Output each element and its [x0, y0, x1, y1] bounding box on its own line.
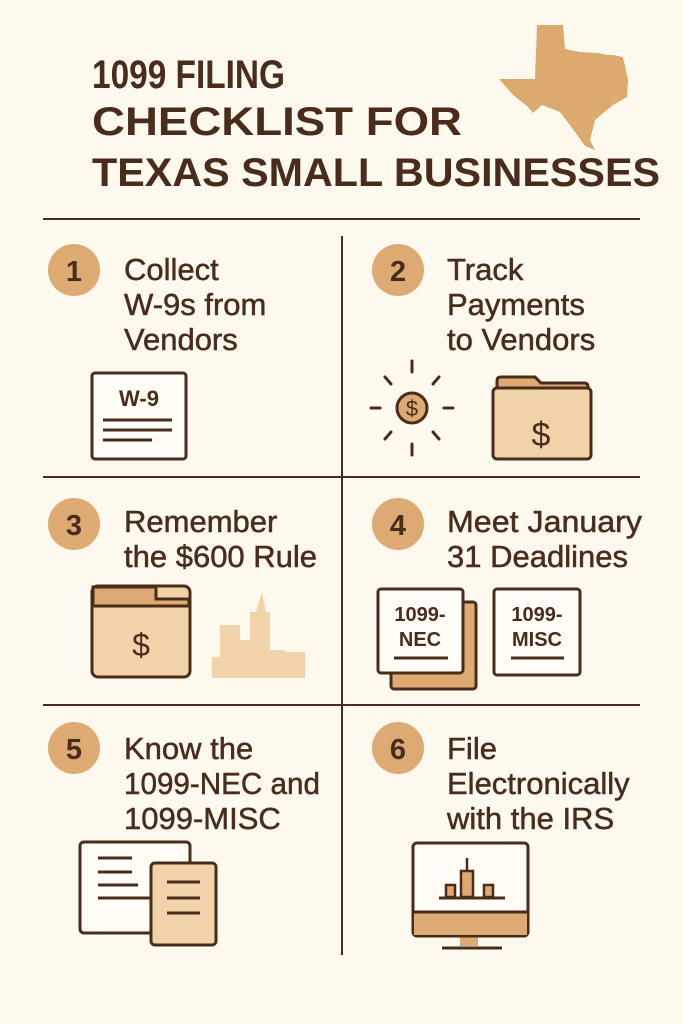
icon: sun coin	[371, 361, 453, 455]
title: TEXAS SMALL BUSINESSES	[92, 151, 660, 195]
text: step 3: the $600 Rule	[124, 539, 317, 574]
number badge 1	[48, 244, 100, 296]
panel: step 6	[372, 722, 630, 948]
text: step 2: to Vendors	[447, 322, 595, 357]
icon: W-9 form	[92, 373, 186, 459]
icon: Texas map	[499, 25, 628, 150]
text: step 1: Vendors	[124, 322, 238, 357]
icon: folder with dollar: $	[532, 416, 551, 454]
text: step 4: Meet January	[447, 504, 643, 539]
panel: step 2	[371, 244, 595, 459]
panel: step 1	[48, 244, 266, 459]
number badge 5	[48, 722, 100, 774]
text: step 5: 1099-MISC	[124, 801, 281, 836]
number badge 5: 5	[66, 734, 82, 766]
text: step 2: Track	[447, 252, 524, 287]
text: step 1: Collect	[124, 252, 219, 287]
icon: monitor chart	[413, 843, 528, 948]
number badge 1: 1	[66, 256, 82, 288]
icon: folder dollar	[92, 586, 190, 677]
panel: step 4	[372, 498, 643, 689]
icon: folder with dollar	[493, 377, 591, 459]
text: step 6: File	[447, 731, 497, 766]
number badge 2	[372, 244, 424, 296]
text: step 2: Payments	[447, 287, 585, 322]
icon: skyline	[212, 592, 305, 678]
icon: two documents	[80, 842, 216, 945]
icon: 1099-NEC form: 1099-	[394, 604, 446, 626]
number badge 2: 2	[390, 256, 406, 288]
panel: step 3	[48, 498, 317, 678]
title: 1099 FILING	[92, 53, 285, 97]
text: step 6: Electronically	[447, 766, 630, 801]
number badge 6: 6	[390, 734, 406, 766]
icon: folder dollar: $	[132, 627, 150, 663]
icon: 1099-NEC form: NEC	[399, 629, 441, 651]
number badge 3: 3	[66, 510, 82, 542]
icon: 1099-MISC form: 1099-	[511, 604, 563, 626]
icon: W-9 form: W-9	[119, 386, 159, 411]
text: step 6: with the IRS	[446, 801, 614, 836]
text: step 5: 1099-NEC and	[124, 766, 320, 801]
number badge 4: 4	[390, 510, 406, 542]
icon: 1099-MISC form	[494, 589, 580, 675]
number badge 6	[372, 722, 424, 774]
number badge 4	[372, 498, 424, 550]
text: step 1: W-9s from	[124, 287, 266, 322]
text: step 3: Remember	[124, 504, 277, 539]
icon: 1099-MISC form: MISC	[512, 629, 562, 651]
text: step 5: Know the	[124, 731, 253, 766]
text: step 4: 31 Deadlines	[447, 539, 628, 574]
title	[92, 53, 660, 195]
icon: 1099-NEC form	[378, 589, 476, 689]
icon: sun coin: $	[406, 396, 418, 421]
panel: step 5	[48, 722, 320, 945]
number badge 3	[48, 498, 100, 550]
title: CHECKLIST FOR	[92, 100, 462, 144]
